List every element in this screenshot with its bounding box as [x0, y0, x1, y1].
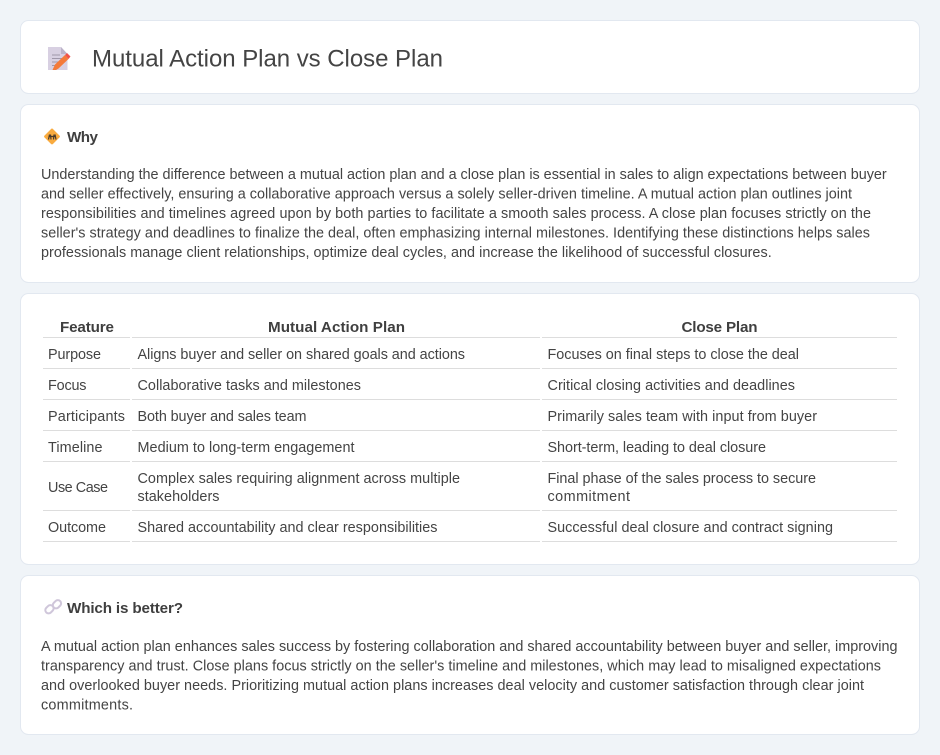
- panel: which is better: [20, 576, 920, 734]
- table row: timeline: Medium to long-term engagement: [138, 440, 354, 456]
- heading: which is better: Which is better?: [67, 600, 183, 617]
- table row: timeline: [48, 440, 766, 456]
- table header row: Mutual Action Plan: [268, 319, 405, 336]
- table row: purpose: Aligns buyer and seller on shared goals and actions: [138, 347, 465, 363]
- table row: use case: Final phase of the sales process to secure: [548, 471, 816, 487]
- panel: title header: [20, 20, 920, 94]
- table row: participants: Participants: [48, 409, 125, 425]
- text block: which is better paragraph: and overlooked buyer needs. Prioritizing mutual action plans increases deal velocity and customer satisfaction through clear joint: [41, 678, 864, 694]
- table row: use case: stakeholders: [138, 489, 220, 505]
- icon: diamond warning sign: [44, 128, 60, 145]
- table header row: Close Plan: [682, 319, 758, 336]
- heading: why: Why: [67, 129, 99, 146]
- text block: which is better paragraph: A mutual action plan enhances sales success by fostering collaboration and shared accountability between buyer and seller, improving: [41, 639, 898, 655]
- table row: outcome: [48, 520, 833, 536]
- text block: why paragraph: responsibilities and timelines agreed upon by both parties to facilitate a smooth sales process. A close plan focuses strictly on the: [41, 206, 871, 222]
- table header row: [60, 319, 758, 336]
- table row: outcome: Outcome: [48, 520, 106, 536]
- table row: use case: Use Case: [48, 480, 108, 496]
- table row: focus: [48, 378, 795, 394]
- text block: why paragraph: and seller effectively, ensuring a collaborative approach versus a solely seller-driven timeline. A mutual action plan outlines joint: [41, 186, 852, 202]
- table row: use case: Complex sales requiring alignment across multiple: [138, 471, 460, 487]
- text block: why paragraph: professionals manage client relationships, optimize deal cycles, and increase the likelihood of successful closures.: [41, 245, 772, 261]
- table row: purpose: Purpose: [48, 347, 101, 363]
- table row: participants: [48, 409, 817, 425]
- icon: memo with pencil: [48, 47, 70, 70]
- table row: timeline: Short-term, leading to deal closure: [548, 440, 766, 456]
- text block: which is better paragraph: commitments.: [41, 698, 133, 714]
- panel: comparison table: [20, 294, 920, 564]
- table row: timeline: Timeline: [48, 440, 102, 456]
- text block: why paragraph: Understanding the difference between a mutual action plan and a close plan is essential in sales to align expectations between buyer: [41, 167, 887, 183]
- title: Mutual Action Plan vs Close Plan: [92, 46, 443, 72]
- table row: focus: Focus: [48, 378, 86, 394]
- table row: purpose: [48, 347, 799, 363]
- icon: chain link: [44, 599, 62, 615]
- table row: focus: Critical closing activities and deadlines: [548, 378, 795, 394]
- table row: outcome: Shared accountability and clear responsibilities: [138, 520, 438, 536]
- text block: why paragraph: seller's strategy and deadlines to finalize the deal, often emphasizing internal milestones. Identifying these distinctions helps sales: [41, 226, 870, 242]
- panel: why: [20, 104, 920, 282]
- table header row: Feature: [60, 319, 114, 336]
- table row: focus: Collaborative tasks and milestones: [138, 378, 361, 394]
- table row: outcome: Successful deal closure and contract signing: [548, 520, 833, 536]
- table row: use case: commitment: [548, 489, 630, 505]
- table row: participants: Both buyer and sales team: [138, 409, 306, 425]
- table row: use case: [48, 471, 816, 505]
- text block: which is better paragraph: [41, 639, 898, 714]
- text block: why paragraph: [41, 167, 887, 261]
- table row: purpose: Focuses on final steps to close the deal: [548, 347, 799, 363]
- table row: participants: Primarily sales team with input from buyer: [548, 409, 817, 425]
- text block: which is better paragraph: transparency and trust. Close plans focus strictly on the seller's timeline and milestones, which may lead to misaligned expectations: [41, 658, 881, 674]
